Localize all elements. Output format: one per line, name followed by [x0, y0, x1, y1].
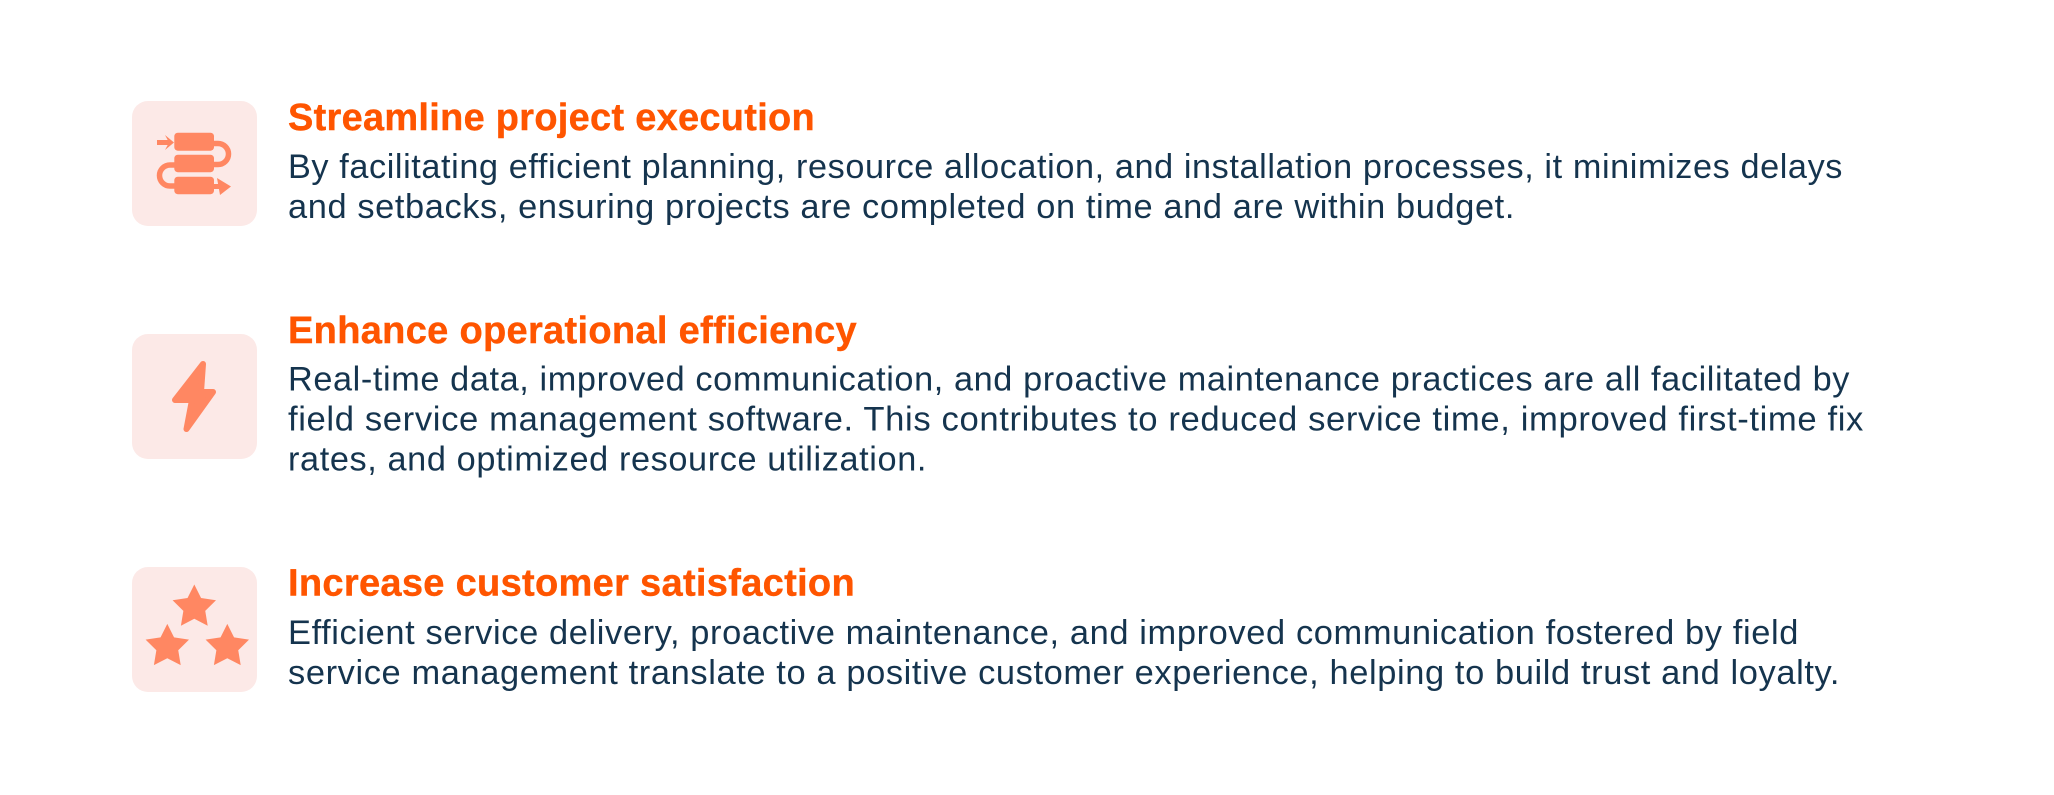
heading: Increase customer satisfaction — [288, 562, 855, 604]
icon: three stars — [132, 567, 257, 692]
body text: rates, and optimized resource utilization. — [288, 440, 927, 478]
icon: lightning bolt — [132, 334, 257, 459]
heading: Enhance operational efficiency — [288, 310, 857, 352]
body text: and setbacks, ensuring projects are completed on time and are within budget. — [288, 188, 1515, 226]
body text — [288, 614, 1840, 692]
panel: streamline project execution — [132, 97, 1843, 226]
heading: Streamline project execution — [288, 97, 815, 139]
body text: Efficient service delivery, proactive maintenance, and improved communication fostered by field — [288, 614, 1799, 652]
icon: process flow — [132, 101, 257, 226]
body text: service management translate to a positive customer experience, helping to build trust and loyalty. — [288, 654, 1840, 692]
body text: Real-time data, improved communication, and proactive maintenance practices are all facilitated by — [288, 360, 1850, 398]
body text — [288, 148, 1843, 226]
body text: By facilitating efficient planning, resource allocation, and installation processes, it minimizes delays — [288, 148, 1843, 186]
body text — [288, 360, 1864, 478]
panel: increase customer satisfaction — [132, 562, 1840, 692]
body text: field service management software. This contributes to reduced service time, improved first-time fix — [288, 400, 1864, 438]
panel: enhance operational efficiency — [132, 310, 1864, 478]
